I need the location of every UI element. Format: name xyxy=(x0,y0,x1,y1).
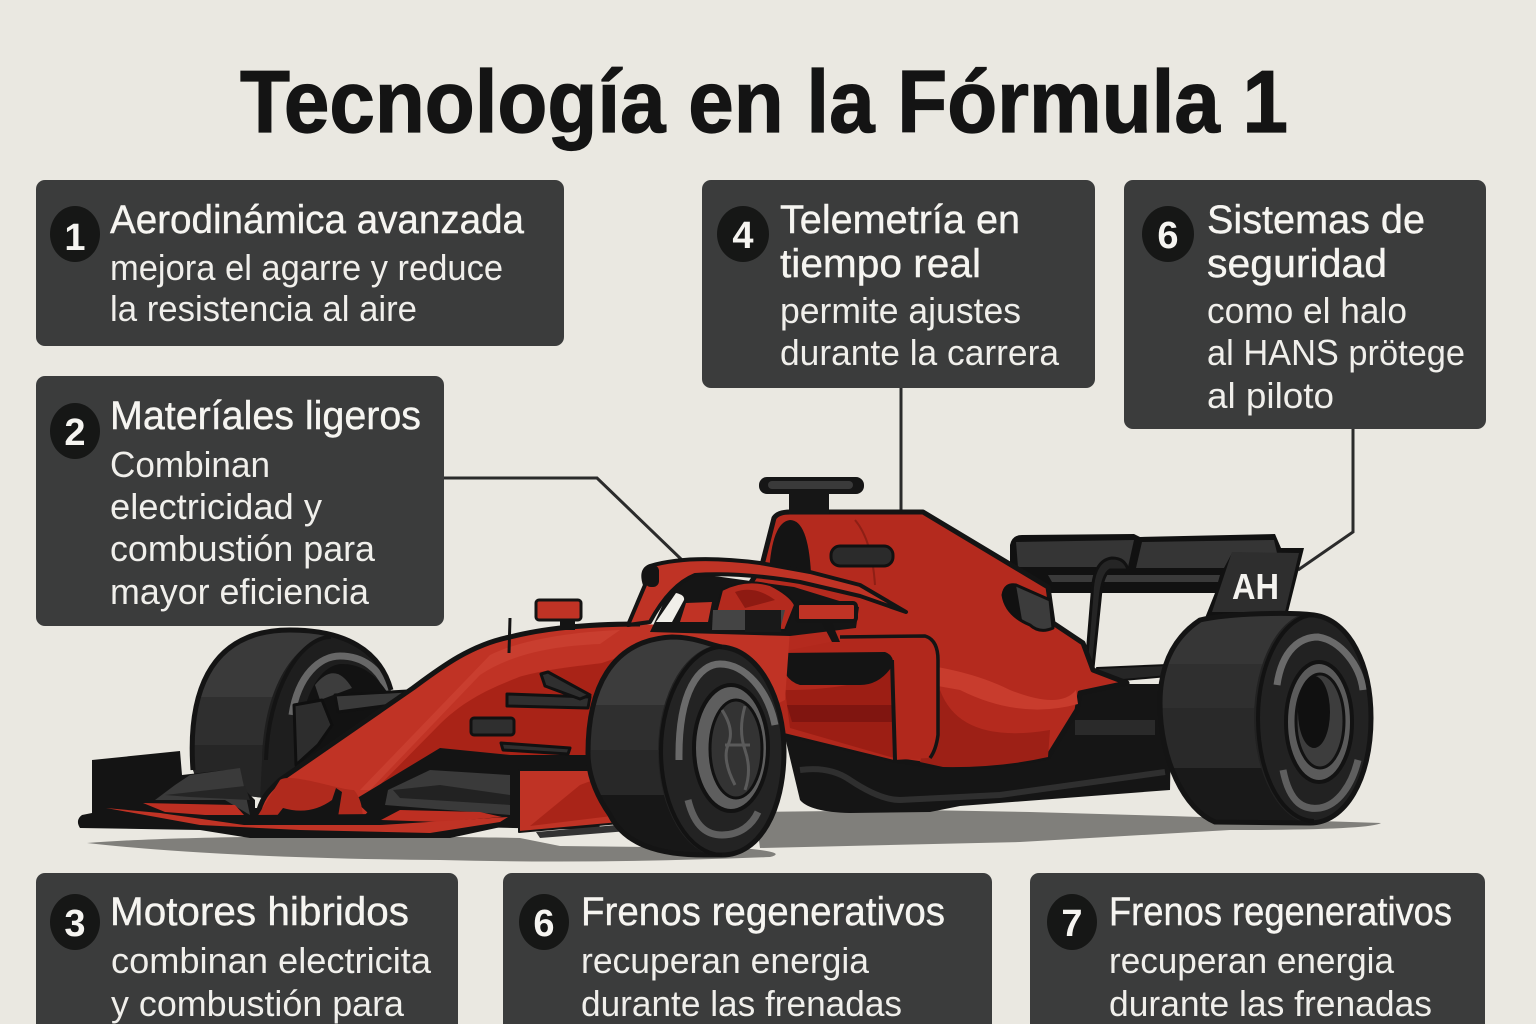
panel 2 text: combustión para xyxy=(110,528,376,569)
rear lower arm xyxy=(1075,720,1155,735)
badge 1 xyxy=(50,206,100,262)
panel 6: seguridad xyxy=(1124,180,1486,429)
cover seam xyxy=(855,520,875,585)
panel 6b text: recuperan energia xyxy=(581,940,870,981)
badge 6 xyxy=(1142,206,1194,262)
left mirror xyxy=(536,600,581,630)
nose tip notch xyxy=(276,788,342,817)
badge 2 xyxy=(50,403,100,459)
rear wing strut xyxy=(1086,558,1128,668)
rear vent xyxy=(1003,585,1053,630)
seat red xyxy=(680,602,712,622)
wheel spokes xyxy=(722,706,750,790)
red wing pieces xyxy=(143,803,244,815)
panel 4 text: durante la carrera xyxy=(780,332,1060,373)
panel 7 text xyxy=(1109,890,1452,1024)
panel 6 text: Sistemas de xyxy=(1207,198,1425,242)
cockpit opening xyxy=(650,574,859,636)
panel 4 text: Telemetría en xyxy=(780,198,1020,242)
engine cover and sidepod xyxy=(690,512,1127,767)
roll hoop intake xyxy=(759,477,864,514)
panel 2 text: mayor eficiencia xyxy=(110,571,370,612)
nose outline xyxy=(257,624,640,817)
panel 4 text: tiempo real xyxy=(780,242,981,286)
rear tyre tread arcs xyxy=(1277,637,1363,690)
panel 3 text: y combustión para xyxy=(111,983,405,1024)
winglets xyxy=(471,672,590,754)
title: Tecnología en la Fórmula 1 xyxy=(240,52,1288,151)
panel 6 text: como el halo xyxy=(1207,290,1407,331)
panel 6b: frenos regenerativos xyxy=(503,873,992,1024)
near wheel rim xyxy=(694,685,768,811)
rear upper arm xyxy=(1097,665,1168,682)
wing flaps near xyxy=(385,770,510,815)
sidepod inner shadow xyxy=(787,705,893,722)
panel 3 text: combinan electricita xyxy=(111,940,432,981)
halo end cap xyxy=(645,565,659,587)
panel 7 text: Frenos regenerativos xyxy=(1109,890,1452,934)
panel 1 text: la resistencia al aire xyxy=(110,288,417,329)
mirror stem xyxy=(822,623,840,642)
panel 1: aerodinámica xyxy=(36,180,564,346)
panel 6 text: al piloto xyxy=(1207,375,1334,416)
sidepod inlet xyxy=(779,652,893,685)
rear vent dark xyxy=(1003,585,1022,620)
cockpit and halo xyxy=(628,559,906,642)
panel 1 text: Aerodinámica avanzada xyxy=(110,198,525,242)
red bodywork xyxy=(690,512,1127,767)
right mirror xyxy=(797,603,856,621)
red wing strip xyxy=(106,808,508,833)
panel 4: telemetría xyxy=(702,180,1095,388)
sidepod duct xyxy=(770,636,938,760)
badge 6 lower: 6 xyxy=(533,903,555,945)
panel 3 text xyxy=(110,890,432,1024)
wing label AH: AH xyxy=(1232,566,1279,607)
under-nose filler xyxy=(250,808,372,826)
panel 6b text xyxy=(581,890,945,1024)
helmet visor xyxy=(712,610,785,630)
body below nose crease xyxy=(375,650,640,790)
nose tip shade xyxy=(257,778,363,817)
panel 1 text: mejora el agarre y reduce xyxy=(110,247,503,288)
panel 6b text: durante las frenadas xyxy=(581,983,902,1024)
airbox camera scoop xyxy=(769,520,811,573)
halo xyxy=(628,559,906,625)
near tyre tread arcs xyxy=(679,664,775,760)
badge 4: 4 xyxy=(732,215,754,257)
badge 6: 6 xyxy=(1157,215,1179,257)
floor edge highlight xyxy=(800,769,1165,800)
panel 7 text: recuperan energia xyxy=(1109,940,1395,981)
panel 2 text xyxy=(110,394,421,612)
far front tyre xyxy=(180,630,400,805)
cockpit gap xyxy=(656,593,684,622)
leader line: panel 6 to car xyxy=(1298,429,1353,570)
panel 2 text: Combinan xyxy=(110,444,270,485)
helmet shading xyxy=(735,590,775,608)
wing flaps far xyxy=(155,768,250,815)
highlight on nose xyxy=(360,630,620,790)
sidepod outline xyxy=(840,636,938,758)
badge 4 xyxy=(717,206,769,262)
badge 2: 2 xyxy=(64,412,86,454)
badge 7: 7 xyxy=(1061,903,1083,945)
panel 3 text: Motores hibridos xyxy=(110,890,409,934)
panel 6 text: al HANS prötege xyxy=(1207,332,1465,373)
panel 2 text: electricidad y xyxy=(110,486,322,527)
sidepod dark inset xyxy=(785,668,894,758)
leader line: panel 2 to car xyxy=(444,478,682,560)
sidepod edge xyxy=(892,660,895,760)
panel 2 text: Materíales ligeros xyxy=(110,394,421,438)
leader line: panel 4 to car xyxy=(900,388,902,514)
panel 6 text xyxy=(1207,198,1465,416)
badge 7 xyxy=(1047,894,1097,950)
floor and rear mechanicals xyxy=(784,684,1172,813)
lower dark shade xyxy=(920,690,1050,767)
panel 4 text xyxy=(780,198,1060,373)
panel 7 text: durante las frenadas xyxy=(1109,983,1432,1024)
front wing endplate near xyxy=(519,770,620,832)
black undernose void xyxy=(354,748,600,830)
panel 3: motores híbridos xyxy=(36,873,458,1024)
helmet xyxy=(712,582,795,630)
rear tyre xyxy=(1150,612,1380,828)
panel 6 text: seguridad xyxy=(1207,242,1387,286)
outer endplate xyxy=(78,751,510,838)
panel 2: materiales xyxy=(36,376,444,626)
panel 7: frenos regenerativos xyxy=(1030,873,1485,1024)
front body and nose xyxy=(257,624,790,830)
rear wing xyxy=(1010,534,1304,618)
front suspension arm xyxy=(335,690,430,712)
badge 1: 1 xyxy=(64,217,86,259)
illustration: F1 car xyxy=(78,477,1381,865)
badge 6 lower xyxy=(519,894,569,950)
antenna xyxy=(509,618,510,653)
highlight shoulder xyxy=(850,660,1078,710)
panel 1 text xyxy=(110,198,525,329)
engine cover slot xyxy=(831,546,893,566)
ground shadow xyxy=(87,810,1381,861)
near front tyre xyxy=(586,634,786,858)
panel 4 text: permite ajustes xyxy=(780,290,1021,331)
badge 3 xyxy=(50,894,100,950)
badge 3: 3 xyxy=(64,903,86,945)
panel 6b text: Frenos regenerativos xyxy=(581,890,945,934)
front wing xyxy=(78,751,640,838)
